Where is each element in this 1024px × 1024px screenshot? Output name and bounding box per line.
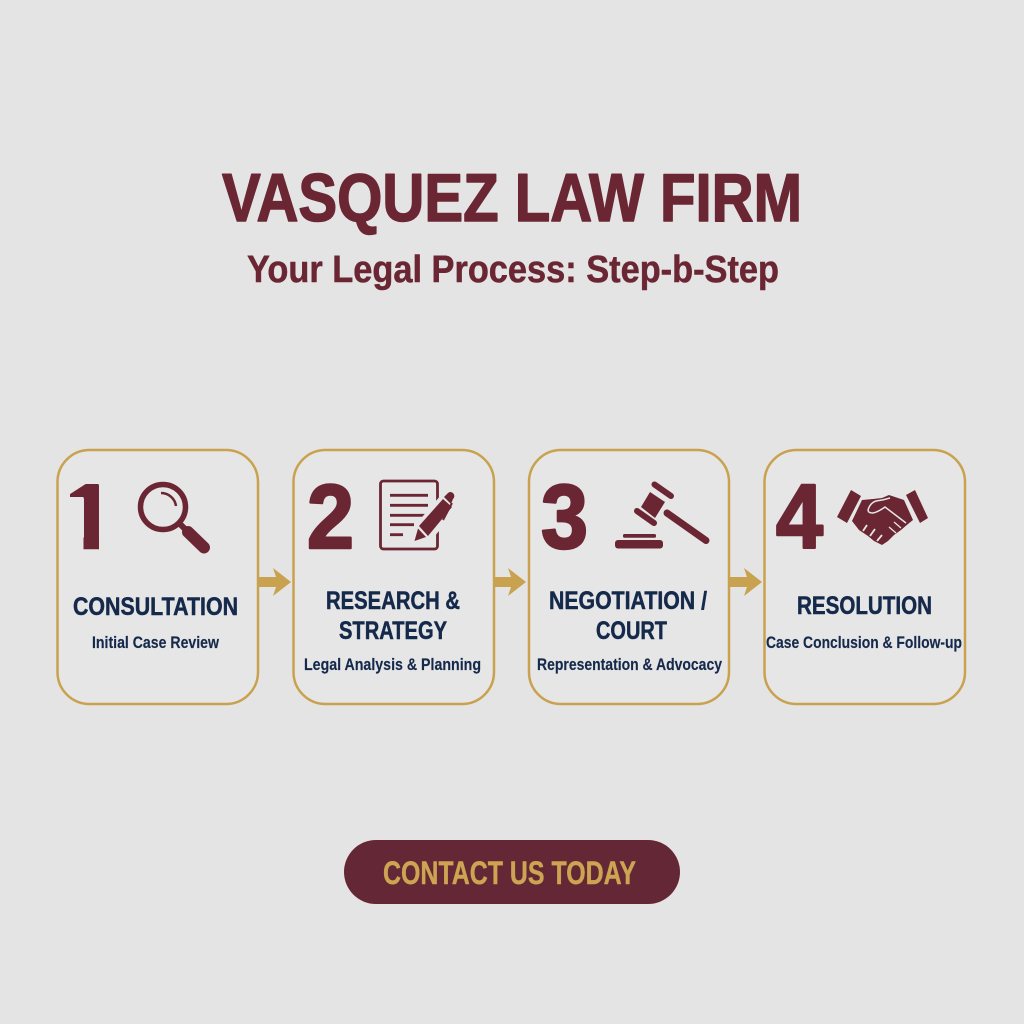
step description: Case Conclusion & Follow-up	[766, 633, 962, 652]
arrow: step 2 to 3	[494, 568, 526, 596]
step description: Representation & Advocacy	[537, 655, 722, 674]
icon: document and pen	[380, 481, 458, 549]
step number 4: 4	[776, 467, 823, 568]
button label: CONTACT US TODAY	[383, 855, 636, 891]
step heading: CONSULTATION	[73, 593, 238, 621]
subtitle: Your Legal Process: Step-b-Step	[247, 249, 779, 291]
arrow: step 3 to 4	[729, 568, 762, 596]
step heading line 2: STRATEGY	[339, 617, 447, 645]
button: contact us today	[344, 840, 680, 904]
step description: Initial Case Review	[92, 633, 220, 652]
panel: step 1 consultation	[58, 450, 258, 704]
step number 1: 1	[64, 467, 115, 568]
icon: magnifying glass	[140, 484, 204, 548]
step heading: RESEARCH &	[326, 587, 460, 615]
step number 2: 2	[307, 467, 354, 568]
step number 3: 3	[541, 467, 588, 568]
arrow: step 1 to 2	[258, 568, 291, 596]
step heading: NEGOTIATION /	[549, 587, 707, 615]
icon: handshake	[837, 490, 928, 545]
panel: step 4 resolution	[764, 450, 965, 704]
icon: gavel	[615, 484, 706, 548]
panel: step 3 negotiation or court	[529, 450, 729, 704]
panel: step 2 research and strategy	[294, 450, 494, 704]
step heading: RESOLUTION	[797, 592, 932, 620]
step heading line 2: COURT	[596, 617, 667, 645]
step description: Legal Analysis & Planning	[304, 655, 481, 674]
title: VASQUEZ LAW FIRM	[222, 160, 802, 236]
